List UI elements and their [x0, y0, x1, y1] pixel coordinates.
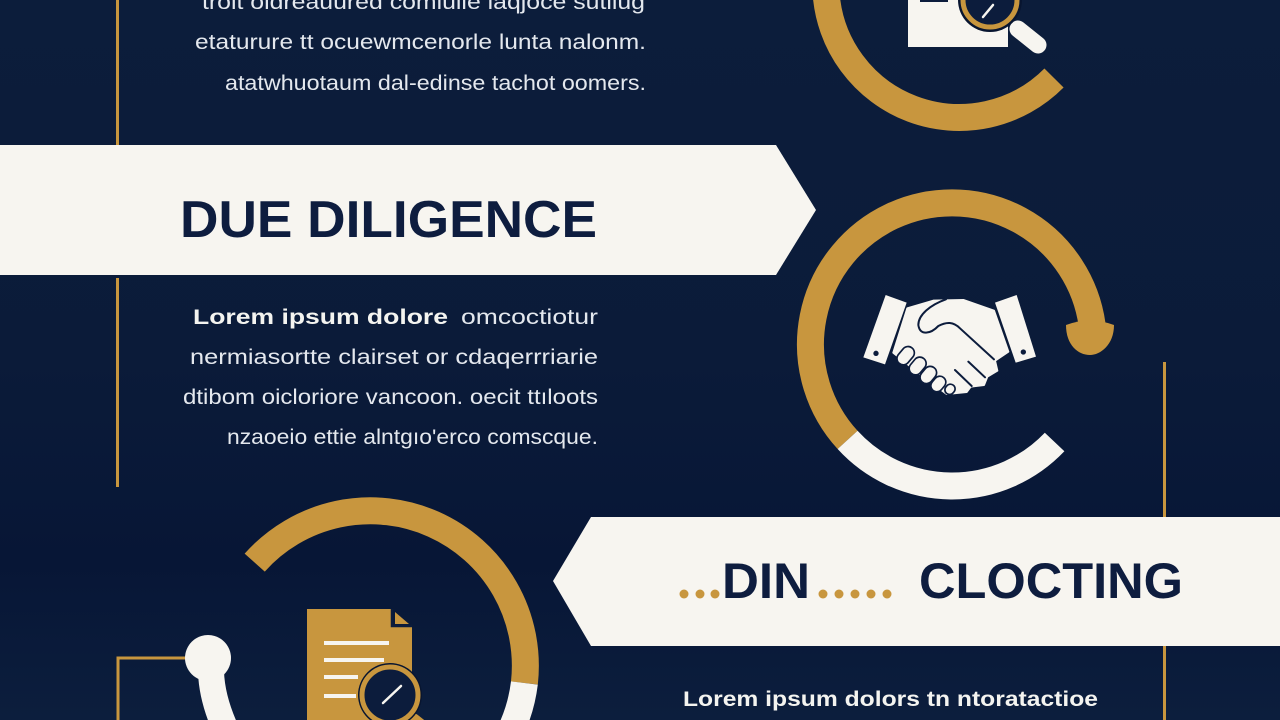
text block: due diligence description: nermiasortte clairset or cdaqerrriarie: [190, 346, 598, 369]
connector line: middle left: [116, 278, 119, 487]
icon: document and magnifier, top right: [908, 0, 1038, 47]
banner: closing: [553, 517, 1280, 646]
banner: due diligence: [0, 145, 816, 275]
text block: due diligence description: Lorem ipsum dolore: [193, 306, 448, 329]
text block: due diligence description: [183, 306, 598, 449]
icon: handshake: [863, 295, 1036, 396]
connector line: top left: [116, 0, 119, 145]
connector line: bottom right: [1163, 646, 1166, 720]
ring: bottom step: [255, 511, 525, 720]
connector line: middle right: [1163, 362, 1166, 517]
decorative gold dots before din: [680, 590, 720, 598]
ring: top gold arc: [826, 0, 1054, 117]
ring: white segment: [508, 683, 524, 720]
text block: top partial paragraph: atatwhuotaum dal-edinse tachot oomers.: [225, 72, 646, 95]
heading: din: DIN: [722, 553, 810, 609]
text block: due diligence description: dtibom oicloriore vancoon. oecit ttıloots: [183, 386, 598, 409]
decorative gold dots after din: [818, 590, 892, 598]
text block: due diligence description: nzaoeio ettie alntgıo'erco comscque.: [227, 426, 598, 449]
ring: white segment: [848, 440, 1055, 486]
text block: due diligence description: omcoctiotur: [461, 306, 598, 329]
arrowhead: gold ring end: [1066, 320, 1114, 355]
heading: due diligence: DUE DILIGENCE: [180, 191, 597, 249]
ring: handshake step: [810, 203, 1114, 486]
connector: gold elbow with white node: [118, 635, 231, 720]
icon: gold document with magnifier: [307, 609, 428, 720]
text block: closing description: Lorem ipsum dolors tn ntoratactioe: [683, 688, 1098, 711]
text block: top partial paragraph: etaturure tt ocuewmcenorle lunta nalonm.: [195, 31, 646, 54]
text block: top partial paragraph: [195, 0, 646, 95]
heading: closing: CLOCTING: [919, 553, 1183, 609]
